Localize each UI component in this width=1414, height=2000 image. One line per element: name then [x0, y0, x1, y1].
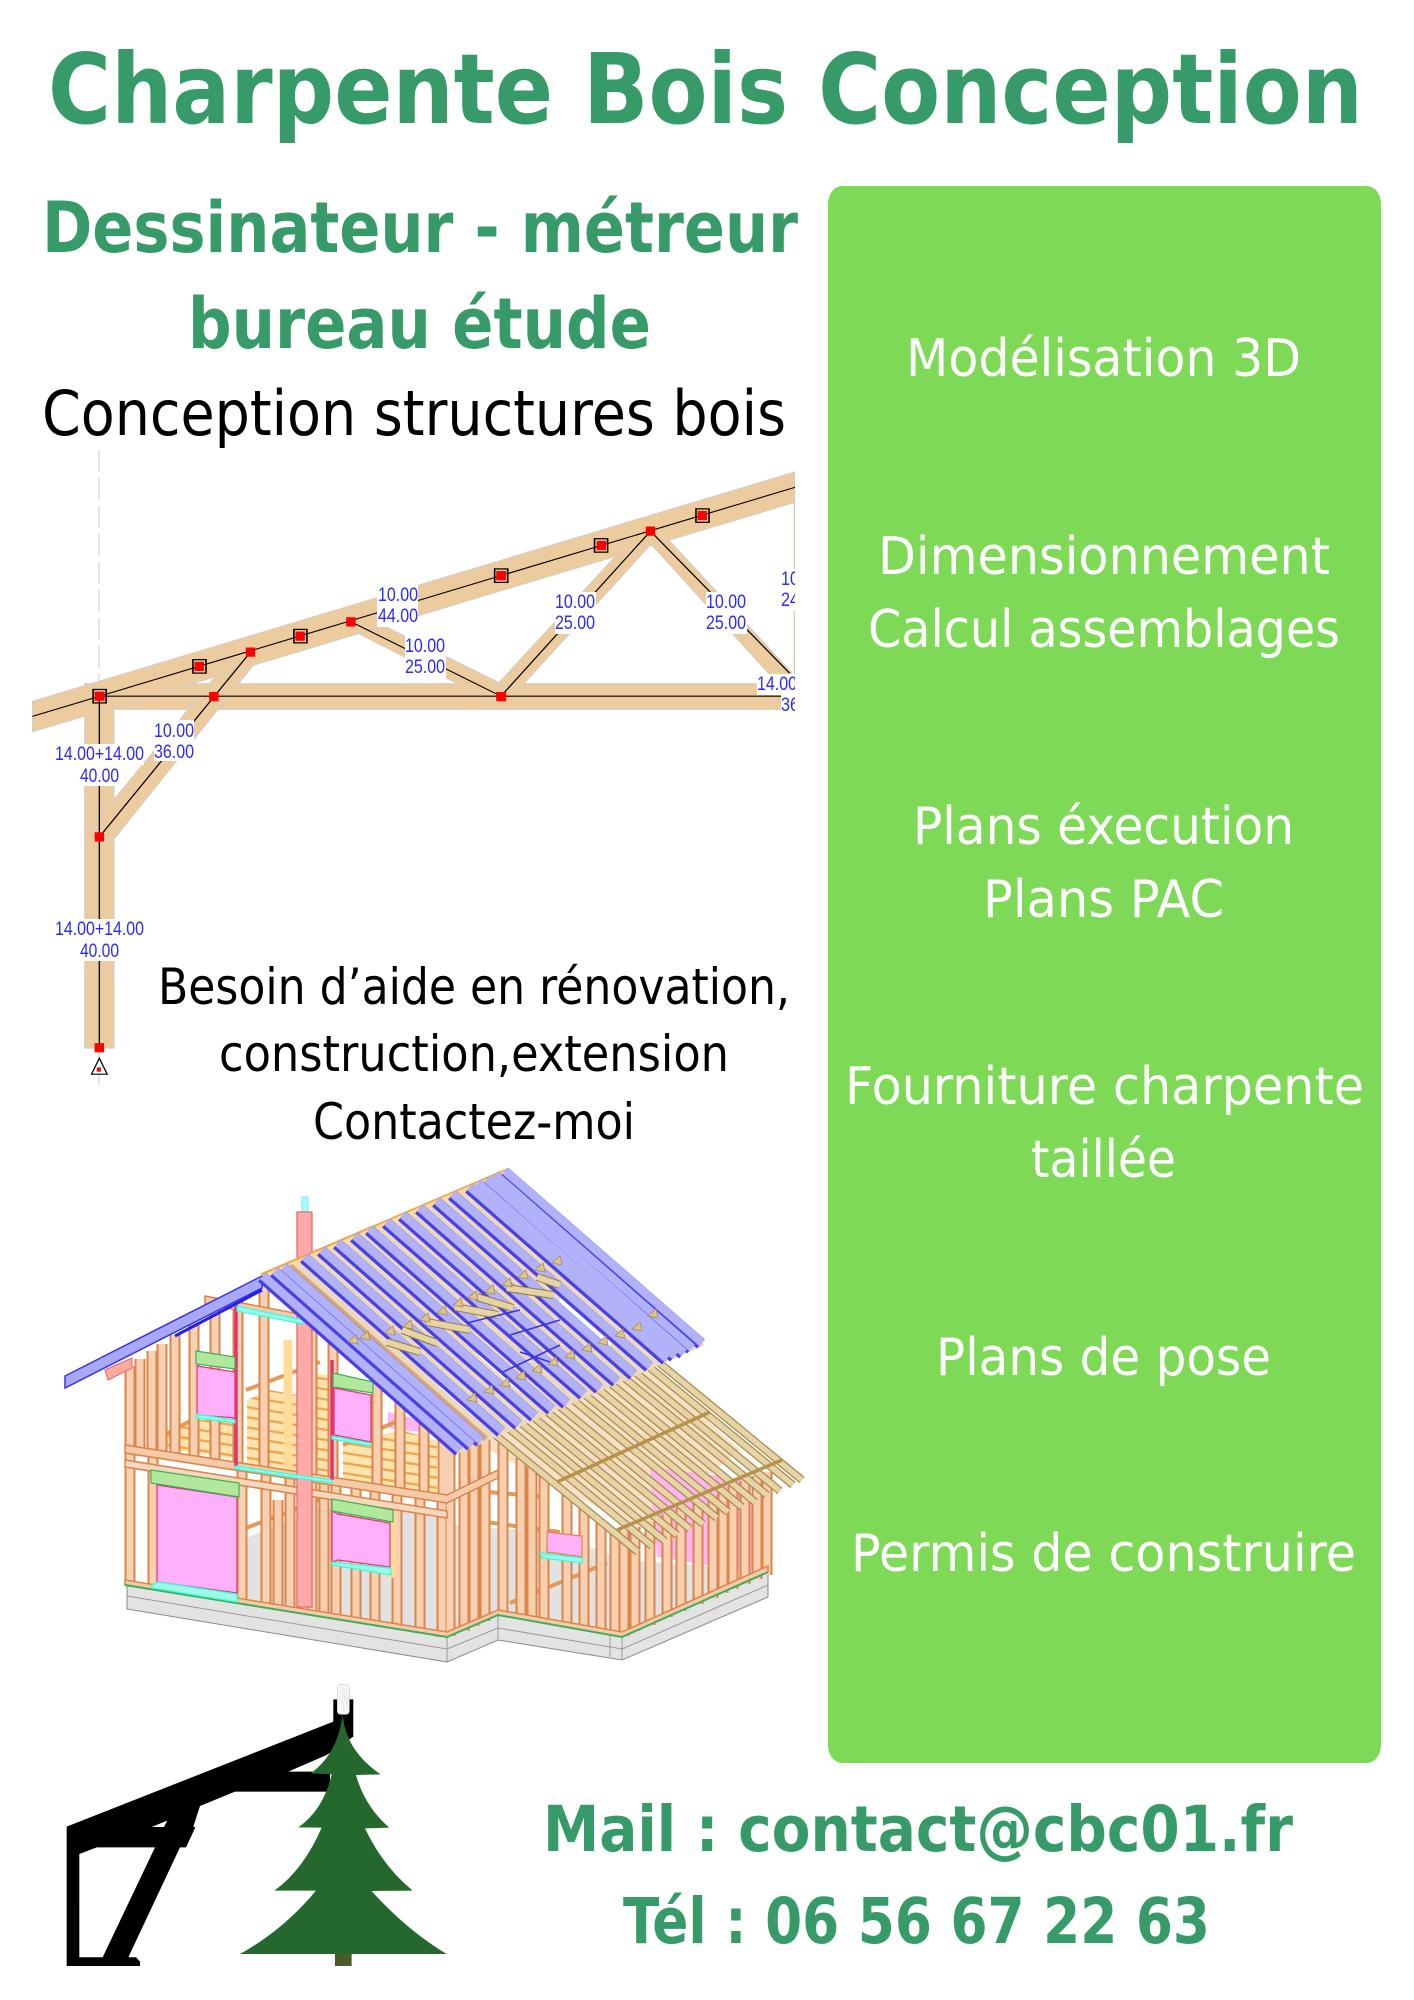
heading: job title [42, 187, 798, 365]
ridge trim [262, 1171, 508, 1277]
upper floor joists [155, 1373, 437, 1495]
logo wood cap [337, 1684, 349, 1714]
panel background [828, 186, 1381, 1763]
pink far window [388, 1412, 420, 1432]
dimension labels: 10.00 [555, 592, 595, 613]
roof cross bracing [348, 1256, 658, 1402]
service: sizing and assemblies: Calcul assemblages [868, 600, 1340, 660]
cyan bands [235, 1466, 332, 1483]
timber members [32, 472, 796, 1048]
dimension labels: 25.00 [706, 613, 746, 634]
tan rafter on roof [290, 1266, 486, 1439]
dashed axis [98, 450, 100, 1085]
call to action text: construction,extension [219, 1025, 729, 1083]
blue roof details [467, 1310, 560, 1372]
door [157, 1485, 237, 1593]
service: sizing and assemblies [868, 527, 1340, 660]
heading: job title: bureau étude [188, 283, 651, 365]
side window [547, 1532, 582, 1557]
service: cut timber supply: Fourniture charpente [845, 1057, 1364, 1117]
3D timber frame house [65, 1171, 802, 1662]
dimension labels: 10.00 [378, 585, 418, 606]
logo truss [67, 1699, 353, 1966]
dimension labels: 40.00 [80, 941, 119, 962]
dimension labels: 14.00+14.00 [55, 919, 144, 940]
concrete slab [127, 1572, 768, 1662]
pink under roof [534, 1268, 575, 1305]
fir tree [240, 1713, 447, 1966]
windows and door [151, 1306, 583, 1602]
service: building permit: Permis de construire [851, 1524, 1356, 1584]
upper right window [334, 1388, 371, 1442]
dimension labels: 14.00 [757, 674, 797, 695]
ground window [332, 1511, 390, 1567]
wall studs [130, 1278, 767, 1637]
service: cut timber supply [845, 1057, 1364, 1190]
lower roof rafters [493, 1361, 802, 1552]
upper roof rafters [262, 1171, 702, 1451]
roof underlay [262, 1171, 705, 1453]
under roof background [470, 1360, 740, 1530]
contact details [543, 1793, 1293, 1958]
subtitle: Conception structures bois [42, 377, 786, 450]
dimension labels: 25.00 [555, 613, 595, 634]
dimension labels: 44.00 [378, 606, 418, 627]
pink stud accents [236, 1290, 332, 1480]
dimension labels: 36.00 [154, 742, 194, 763]
logo: truss and fir tree [67, 1684, 447, 1966]
back plates [155, 1362, 607, 1603]
service: cut timber supply: taillée [1031, 1130, 1176, 1190]
contact details: Tél : 06 56 67 22 63 [623, 1885, 1210, 1958]
service: sizing and assemblies: Dimensionnement [878, 527, 1330, 587]
chimney [297, 1197, 312, 1607]
green sill line [125, 1572, 768, 1637]
dimension labels [54, 569, 799, 962]
service: 3D modelling: Modélisation 3D [906, 329, 1301, 389]
panel: services [828, 186, 1381, 1763]
dimension labels: 10.00 [405, 636, 445, 657]
dimension labels: 10.00 [706, 592, 746, 613]
pink back wall [650, 1467, 755, 1573]
dimension labels: 10 [781, 569, 799, 590]
heading: job title: Dessinateur - métreur [42, 187, 798, 269]
floor inside [246, 1507, 768, 1637]
upper left window [197, 1366, 235, 1418]
call to action text: Contactez-moi [313, 1093, 635, 1151]
service: drawings [913, 797, 1294, 930]
yellow stud [288, 1340, 391, 1578]
truss diagram [32, 450, 799, 1085]
service: installation plans: Plans de pose [936, 1328, 1271, 1388]
structural lines and nodes [32, 487, 796, 1074]
dimension labels: 25.00 [405, 657, 445, 678]
service: drawings: Plans éxecution [913, 797, 1294, 857]
call to action text: Besoin d’aide en rénovation, [158, 958, 790, 1016]
dimension labels: 10.00 [154, 721, 194, 742]
dimension labels: 36 [781, 695, 799, 716]
left gable overhang [65, 1276, 262, 1388]
contact details: Mail : contact@cbc01.fr [543, 1793, 1293, 1866]
wall plates [125, 1296, 768, 1637]
service: drawings: Plans PAC [983, 870, 1224, 930]
roof white gaps [430, 1270, 640, 1415]
call to action text [158, 958, 790, 1151]
dimension labels: 24 [781, 590, 799, 611]
dimension labels: 40.00 [80, 766, 119, 787]
dimension labels: 14.00+14.00 [55, 744, 144, 765]
